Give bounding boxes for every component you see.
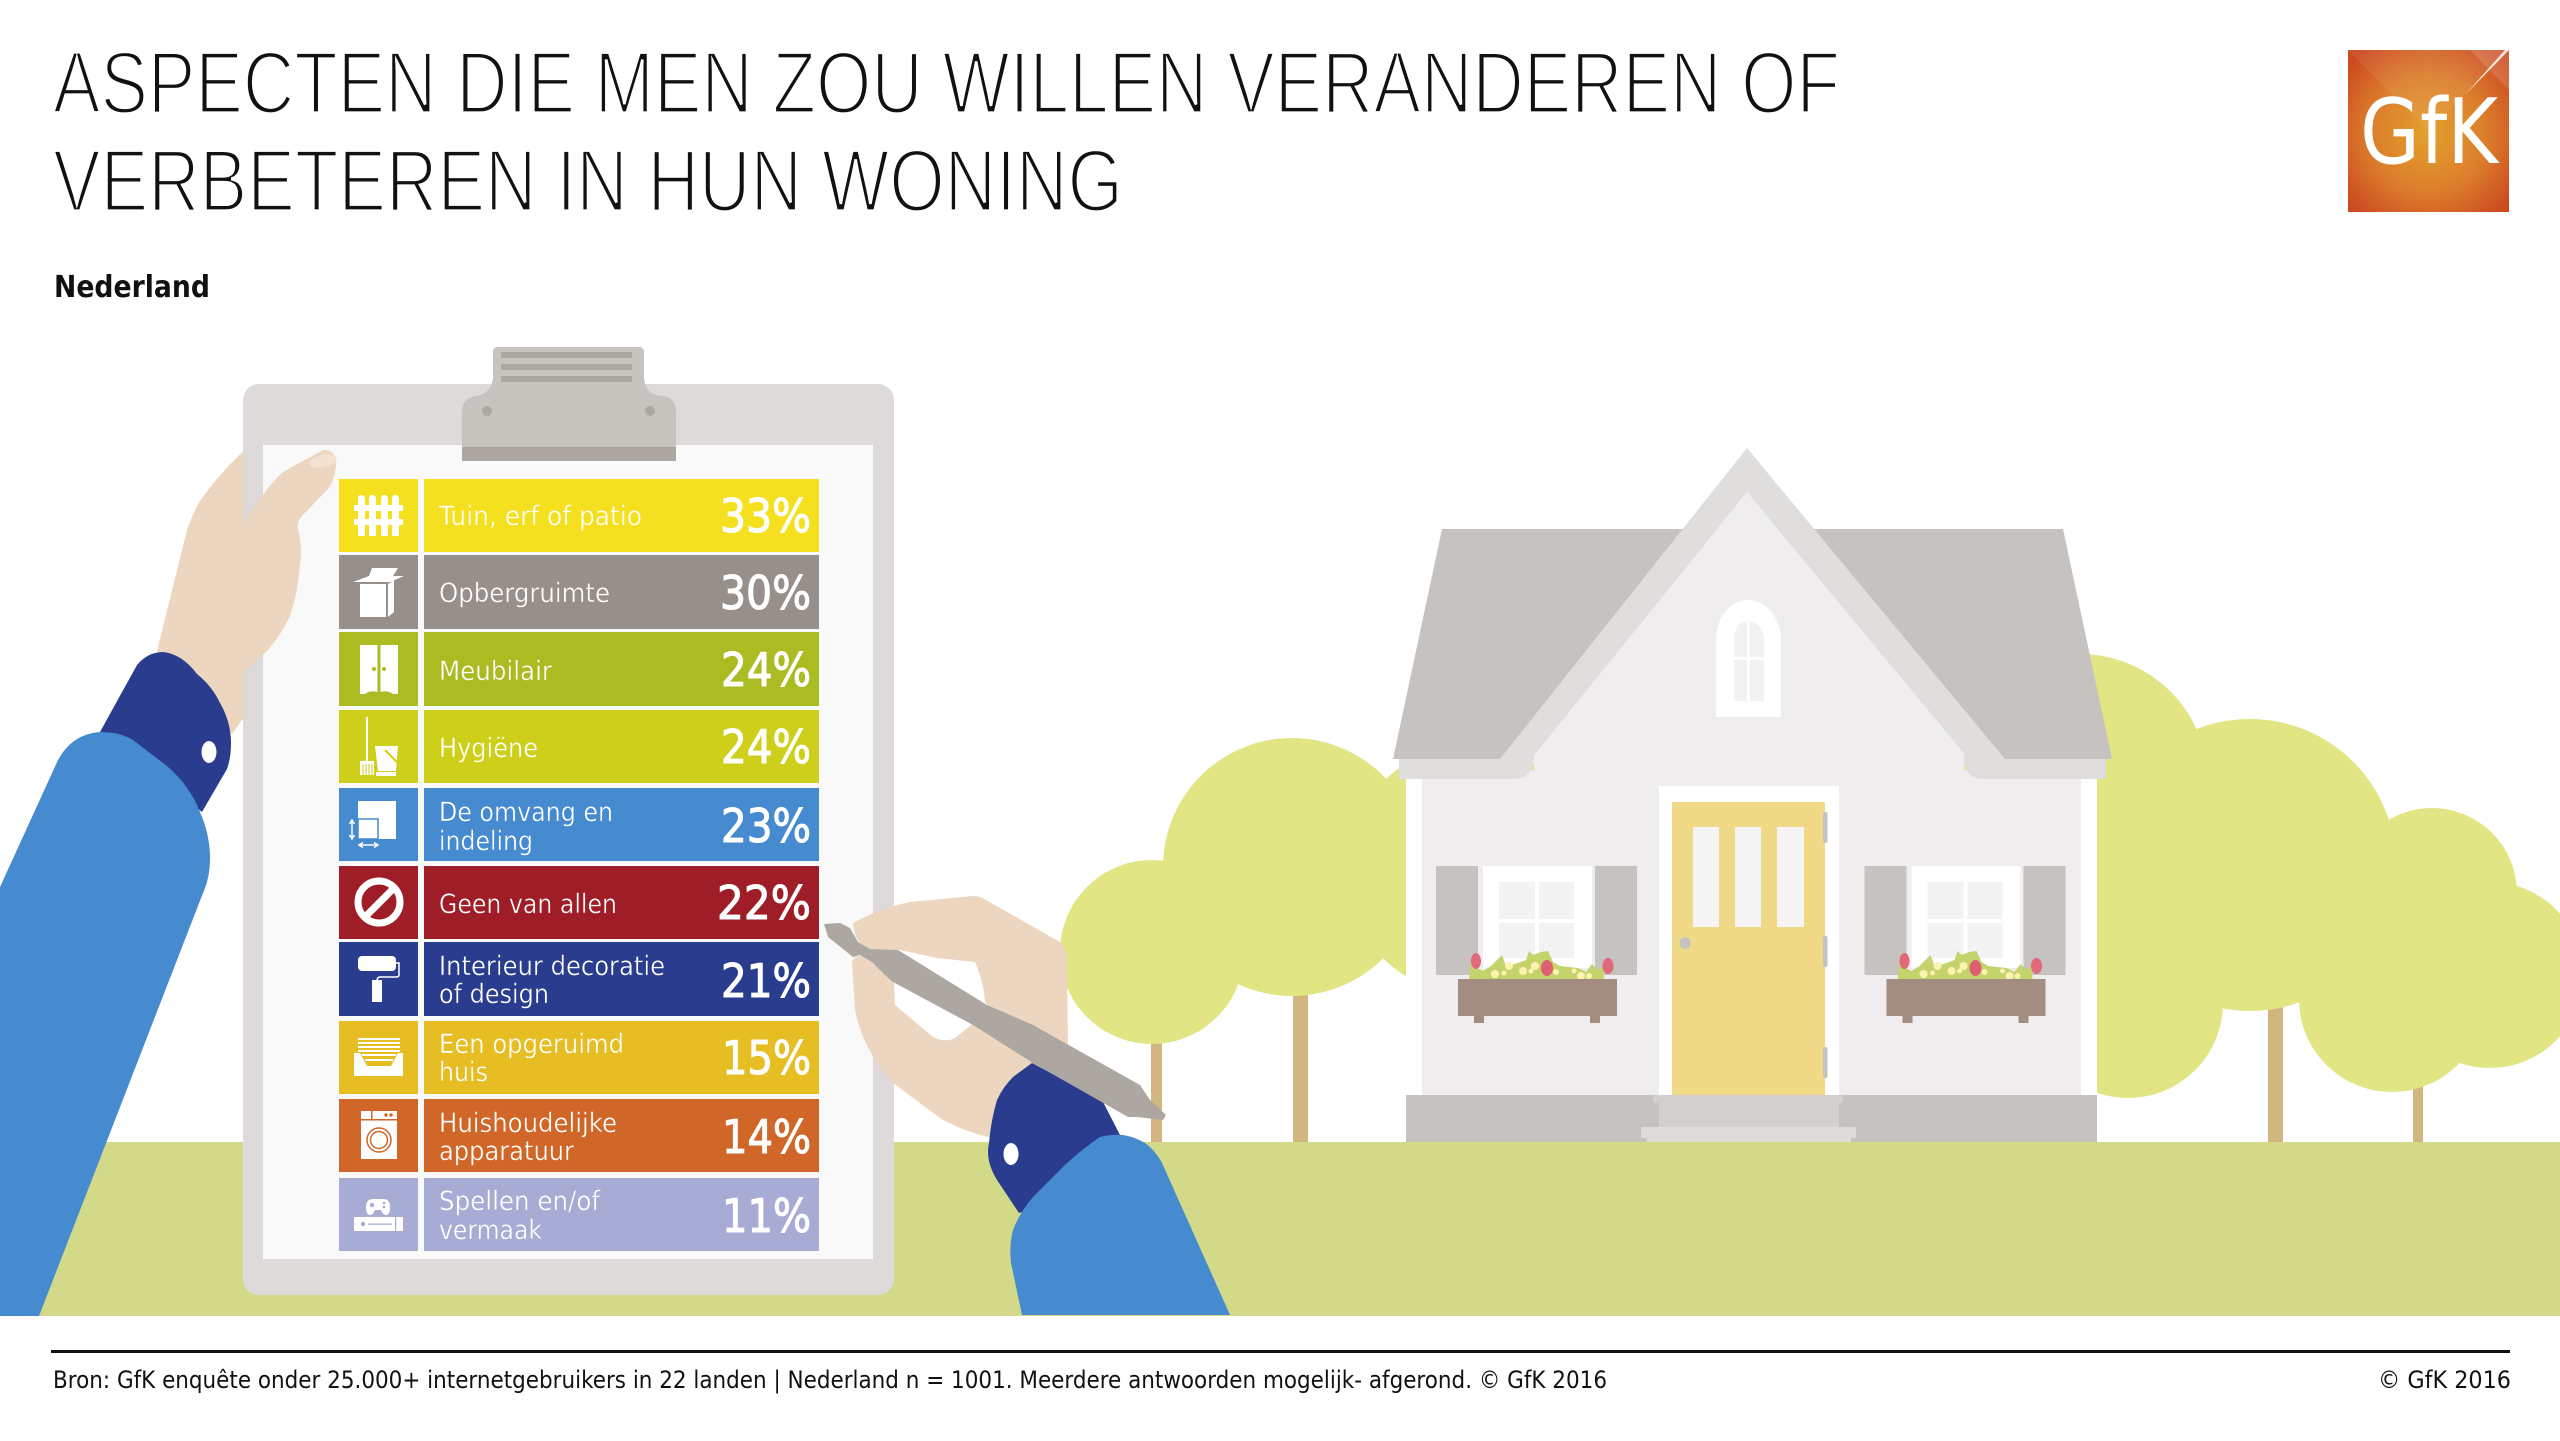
icon: cupboard — [360, 645, 398, 694]
row: Spellen en/of vermaak — [339, 1178, 819, 1251]
row: Interieur decoratie of design: of design — [439, 979, 549, 1010]
row: De omvang en indeling: 23% — [721, 799, 811, 853]
left hand behind the board — [157, 445, 300, 734]
window left — [1436, 866, 1637, 1023]
row: Huishoudelijke apparatuur: 14% — [722, 1110, 811, 1164]
logo: GfK — [2348, 50, 2509, 212]
icon: prohibited — [358, 881, 400, 923]
row: Huishoudelijke apparatuur: apparatuur — [439, 1136, 575, 1167]
row: Opbergruimte: 30% — [720, 566, 811, 620]
row: Interieur decoratie of design — [339, 942, 819, 1016]
steps — [1641, 1095, 1856, 1142]
row: Interieur decoratie of design: Interieur decoratie — [439, 951, 665, 982]
row: Spellen en/of vermaak: 11% — [722, 1189, 811, 1243]
row: De omvang en indeling: De omvang en — [439, 797, 613, 828]
icon: inbox tray — [354, 1038, 403, 1076]
row: Een opgeruimd huis: Een opgeruimd — [439, 1029, 624, 1060]
arched attic window — [1716, 600, 1781, 717]
icon: resize — [350, 801, 396, 848]
row: Interieur decoratie of design: 21% — [721, 954, 811, 1008]
row: Huishoudelijke apparatuur: Huishoudelijke — [439, 1108, 617, 1139]
house — [1393, 448, 2112, 1142]
thumb and palm over board — [200, 450, 336, 700]
hand: thumb and palm — [852, 956, 1040, 1140]
thumbnail — [308, 452, 338, 470]
trees: left group — [1060, 738, 1594, 1144]
row: Een opgeruimd huis — [339, 1021, 819, 1094]
footer source text: Bron: GfK enquête onder 25.000+ internetgebruikers in 22 landen | Nederland n = 1001. Meerdere antwoorden mogelijk- afgerond. © GfK 2016 — [53, 1366, 1607, 1394]
hand: upper fingers — [853, 896, 1068, 1062]
cuff — [100, 652, 231, 812]
logo: GfK: GfK — [2360, 80, 2500, 185]
cuff button — [1004, 1143, 1018, 1165]
footer divider — [51, 1350, 2510, 1353]
trees: right group — [1952, 654, 2560, 1144]
subtitle: country: Nederland — [54, 270, 210, 305]
row: Tuin, erf of patio — [339, 479, 819, 552]
icon: box — [353, 568, 404, 617]
title: ASPECTEN DIE MEN ZOU WILLEN VERANDEREN OF — [53, 33, 1840, 132]
sleeve — [1010, 1135, 1230, 1315]
row: Tuin, erf of patio: Tuin, erf of patio — [438, 501, 642, 532]
row: Opbergruimte — [339, 555, 819, 629]
icon: broom and bucket — [360, 717, 398, 776]
row: Tuin, erf of patio: 33% — [720, 489, 811, 543]
row: Spellen en/of vermaak: Spellen en/of — [439, 1186, 601, 1217]
icon: washing machine — [361, 1111, 397, 1159]
row: Hygiëne — [339, 710, 819, 783]
foundation — [1406, 1095, 2097, 1142]
sleeve — [0, 732, 210, 1316]
ground — [0, 1142, 2560, 1316]
row: Geen van allen: 22% — [717, 876, 811, 930]
board — [243, 384, 894, 1295]
row: Meubilair: Meubilair — [439, 656, 553, 687]
row: Spellen en/of vermaak: vermaak — [439, 1215, 542, 1246]
gable and eave trim — [1399, 448, 2106, 779]
cuff — [988, 1063, 1120, 1213]
cuff button — [202, 741, 216, 763]
row: De omvang en indeling — [339, 788, 819, 861]
row: De omvang en indeling: indeling — [439, 826, 533, 857]
row: Een opgeruimd huis: 15% — [722, 1031, 811, 1085]
footer copyright: © GfK 2016 — [2378, 1366, 2511, 1394]
gable — [1534, 492, 1965, 790]
window right — [1864, 866, 2066, 1023]
icon: paint roller — [358, 956, 399, 1002]
icon: fence — [354, 495, 403, 536]
right arm, hand and pen — [824, 896, 1230, 1315]
row: Meubilair — [339, 632, 819, 706]
walls — [1406, 770, 2097, 1096]
clip — [462, 347, 676, 461]
left arm and hand — [0, 450, 338, 1316]
row: Huishoudelijke apparatuur — [339, 1099, 819, 1172]
clipboard — [243, 347, 894, 1295]
door — [1659, 786, 1839, 1096]
row: Hygiëne: Hygiëne — [439, 733, 538, 764]
row: Geen van allen: Geen van allen — [439, 889, 617, 920]
title: VERBETEREN IN HUN WONING — [53, 131, 1123, 230]
icon: game console — [354, 1199, 403, 1231]
paper — [263, 445, 873, 1259]
row: Hygiëne: 24% — [721, 720, 811, 774]
row: Geen van allen — [339, 866, 819, 939]
row: Opbergruimte: Opbergruimte — [439, 578, 610, 609]
row: Een opgeruimd huis: huis — [439, 1057, 488, 1088]
pen — [824, 923, 1166, 1120]
roof — [1393, 529, 2112, 759]
row: Meubilair: 24% — [721, 643, 811, 697]
title — [53, 33, 1840, 230]
